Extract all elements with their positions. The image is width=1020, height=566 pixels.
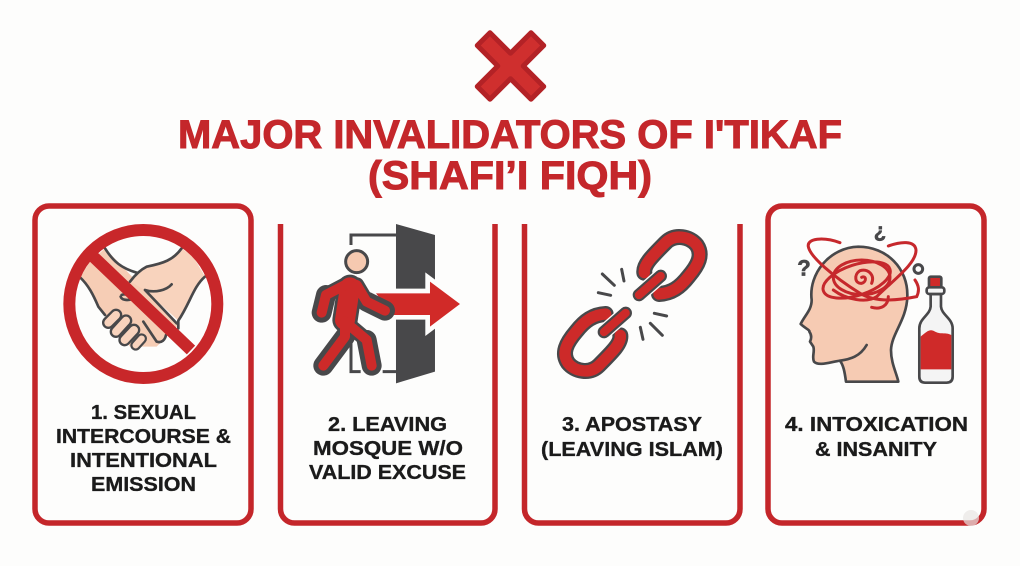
icon: confused head and bottle: [797, 220, 953, 383]
icon: red X mark: [457, 12, 564, 120]
label 1: INTERCOURSE &: [56, 425, 231, 448]
panel: leaving mosque: [280, 224, 495, 523]
label 3: (LEAVING ISLAM): [541, 438, 723, 461]
title: [178, 113, 842, 198]
label 1: 1. SEXUAL: [91, 401, 196, 424]
label 1: INTENTIONAL: [70, 449, 217, 472]
label 1: EMISSION: [91, 473, 196, 496]
icon: prohibited handshake: [69, 230, 217, 378]
panel: intoxication and insanity: [768, 206, 984, 523]
watermark sparkle: [963, 510, 979, 526]
label 3: [541, 413, 723, 461]
title: (SHAFI’I FIQH): [368, 154, 652, 198]
card border 4: [768, 206, 984, 523]
icon: confused head and bottle: ¿: [874, 220, 886, 242]
icon: broken chain link: [565, 237, 700, 371]
card border 1: [35, 206, 251, 523]
panel: sexual intercourse and emission: [35, 206, 251, 523]
icon: person exiting door: [322, 224, 460, 383]
panel: apostasy: [524, 224, 740, 523]
title: MAJOR INVALIDATORS OF I'TIKAF: [178, 113, 842, 157]
label 4: 4. INTOXICATION: [785, 413, 968, 436]
card border 2: [280, 224, 495, 523]
card border 3: [524, 224, 740, 523]
label 3: 3. APOSTASY: [562, 413, 702, 436]
label 4: [785, 413, 968, 461]
label 4: & INSANITY: [815, 438, 937, 461]
icon: confused head and bottle: ?: [797, 255, 811, 280]
label 2: VALID EXCUSE: [309, 461, 466, 484]
label 2: 2. LEAVING: [328, 413, 447, 436]
label 1: [56, 401, 231, 496]
label 2: [309, 413, 466, 484]
label 2: MOSQUE W/O: [313, 437, 463, 460]
